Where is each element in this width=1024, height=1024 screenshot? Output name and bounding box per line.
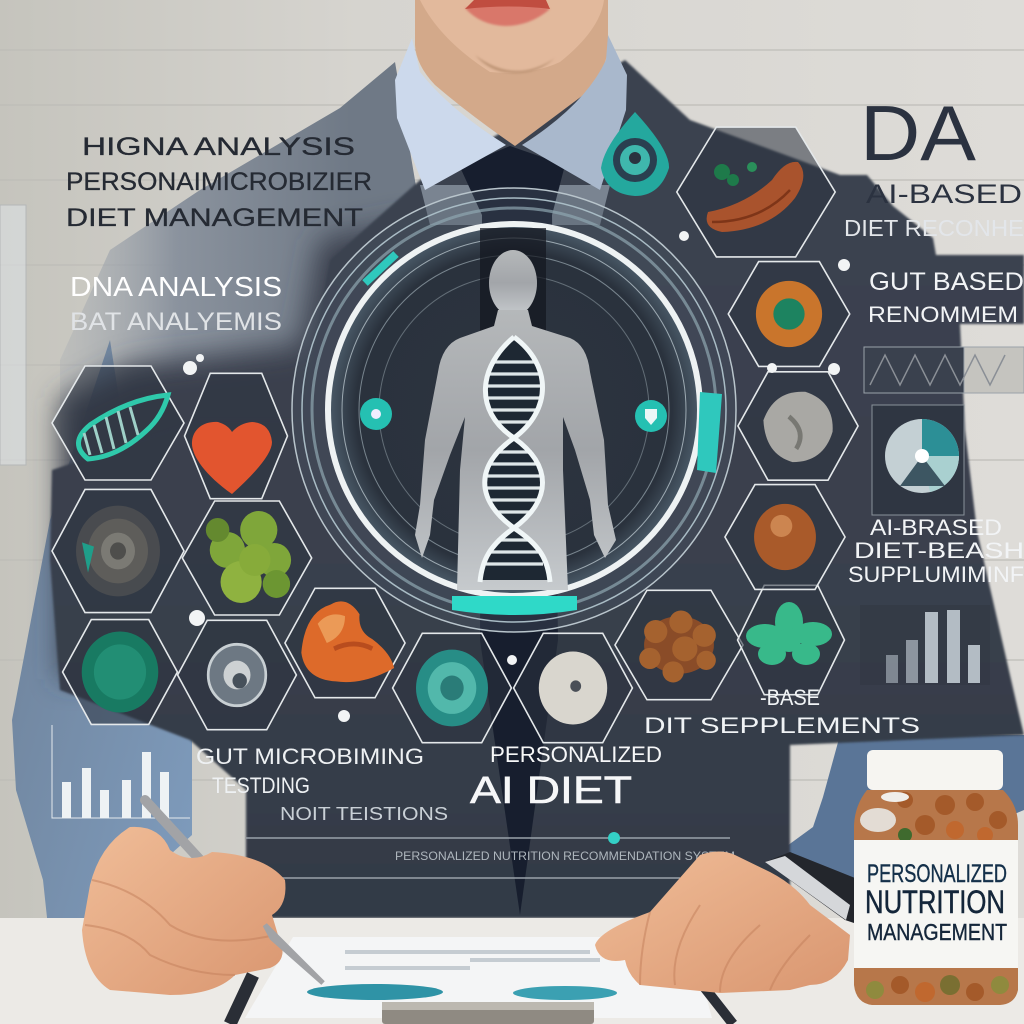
- soft dark left of jacket: [60, 220, 420, 680]
- top-left heading: DIET MANAGEMENT: [66, 204, 363, 232]
- diet supplements text: -BASE: [760, 685, 820, 710]
- shirt under collar: [420, 185, 610, 225]
- desk: [0, 918, 1024, 1024]
- AI-based supplements text: DIET-BEASH: [854, 538, 1024, 563]
- AI-based supplements text: SUPPLUMIMINF: [848, 562, 1024, 587]
- jar label: [854, 840, 1018, 968]
- decorative dots: [183, 231, 850, 722]
- hexagon: orange food: [285, 588, 405, 698]
- DNA analysis heading: [70, 271, 282, 336]
- top-right heading: AI-BASED: [866, 179, 1022, 209]
- hexagon: orange gut: [725, 485, 845, 589]
- dark front of jacket: [50, 60, 1024, 918]
- DNA analysis heading: DNA ANALYSIS: [70, 271, 282, 302]
- gut microbiome testing text: TESTDING: [212, 773, 310, 798]
- shirt collar right: [522, 35, 627, 190]
- left hand with pen: [82, 800, 323, 995]
- gut based text: [868, 268, 1024, 327]
- hexagon: white capsule: [514, 633, 632, 743]
- hexagon: green clover: [738, 585, 844, 695]
- personalized AI diet text: [470, 742, 662, 812]
- hexagon: green microbe: [63, 620, 177, 724]
- clipboard with report: [230, 937, 733, 1024]
- hexagon: grey organ: [738, 372, 858, 480]
- left bar chart: [52, 725, 190, 818]
- top-left heading: HIGNA ANALYSIS: [82, 133, 355, 161]
- right sleeve: [765, 735, 1024, 880]
- pie chart panel: [872, 405, 964, 515]
- hexagon: teal dna: [52, 366, 184, 480]
- icon: sausage and leaves: [707, 162, 803, 232]
- gut based text: RENOMMEM: [868, 302, 1018, 327]
- left shoulder: [60, 62, 420, 440]
- top-right heading: DIET RECONHE: [844, 215, 1024, 241]
- bar chart right: [860, 605, 990, 685]
- neck and chin: [415, 0, 608, 146]
- icon: heart: [192, 422, 272, 494]
- hexagon: food bowl: [728, 262, 850, 366]
- lips: [465, 0, 550, 26]
- hexagon: microbe dish: [52, 489, 184, 613]
- hexagon: green vegetables: [182, 501, 312, 615]
- personalized AI diet text: PERSONALIZED: [490, 742, 662, 767]
- right hand: [595, 852, 850, 993]
- tie: [460, 146, 565, 915]
- diet supplements text: DIT SEPPLEMENTS: [644, 713, 920, 738]
- hexagon: teal microbe: [393, 633, 511, 743]
- gut based text: GUT BASED: [869, 268, 1024, 296]
- sketch panel right: [864, 347, 1024, 393]
- hexagon: sausage: [677, 127, 835, 257]
- left sleeve: [12, 340, 192, 955]
- jar contents: [866, 792, 1009, 1002]
- gut microbiome testing text: [196, 744, 448, 824]
- AI-based supplements text: [848, 515, 1024, 587]
- hexagon: nuts: [615, 590, 743, 700]
- icon: teal drop: [601, 112, 669, 196]
- icon: clover: [746, 602, 832, 665]
- hexagon: heart: [185, 373, 287, 499]
- hexagon: capsule ring: [178, 620, 296, 730]
- jar: [854, 750, 1018, 1005]
- diet supplements text: [644, 685, 920, 738]
- top-right heading: DA: [860, 89, 976, 177]
- top-right heading: [844, 89, 1024, 241]
- AI-based supplements text: AI-BRASED: [870, 515, 1002, 540]
- gut microbiome testing text: NOIT TEISTIONS: [280, 804, 448, 824]
- central hologram ring: [292, 188, 736, 632]
- jar lid: [867, 750, 1003, 790]
- top-left heading: [66, 133, 372, 232]
- human body figure: [415, 250, 616, 590]
- shirt collar left: [395, 38, 506, 190]
- small print line: PERSONALIZED NUTRITION RECOMMENDATION SYSTEM: [395, 849, 735, 863]
- right cuff and watch: [765, 852, 860, 925]
- top-left heading: PERSONAIMICROBIZIER: [66, 168, 372, 196]
- DNA analysis heading: BAT ANALYEMIS: [70, 308, 282, 336]
- small print line: [246, 832, 735, 878]
- personalized AI diet text: AI DIET: [470, 770, 632, 812]
- gut microbiome testing text: GUT MICROBIMING: [196, 744, 424, 769]
- DNA helix: [480, 337, 550, 582]
